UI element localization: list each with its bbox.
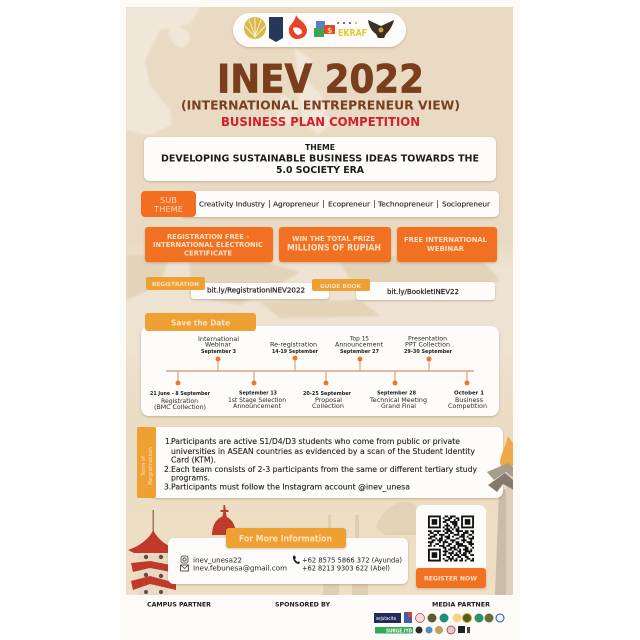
event: top 15 announcement: Top 15 (349, 336, 369, 342)
outer page margin (120, 0, 520, 640)
panel: sub theme: THEME (153, 205, 183, 214)
event: business competition (448, 390, 487, 410)
link: registration (146, 277, 329, 299)
panel: contact information (168, 528, 408, 584)
phone numbers: +62 8575 5866 372 (Ayunda) (302, 556, 402, 564)
event: technical meeting: Technical Meeting (369, 398, 427, 404)
event: business competition: Business (455, 398, 483, 404)
panel: sub theme (141, 191, 499, 217)
rules list: programs. (171, 474, 210, 482)
event: top 15 announcement: September 27 (340, 349, 379, 355)
event: presentation: 29-30 September (404, 349, 452, 355)
panel: theme: 5.0 SOCIETY ERA (276, 165, 364, 176)
heading: save the date (145, 313, 256, 331)
subtitle: (INTERNATIONAL ENTREPRENEUR VIEW) (181, 98, 460, 112)
media partner logos (374, 612, 504, 634)
panel: timeline (141, 313, 499, 416)
event: registration: (BMC Collection) (154, 405, 206, 411)
title: INEV 2022 (217, 58, 424, 102)
vertical label: Registration (148, 446, 154, 485)
icon: shield logo (269, 17, 283, 42)
event: presentation: Presentation (408, 336, 447, 342)
event: business competition: October 1 (454, 390, 484, 396)
monument top: flame and cap (487, 436, 513, 492)
event: re-registration: Re-registration (270, 342, 317, 348)
event: technical meeting (369, 390, 427, 410)
link: guide book (312, 279, 495, 300)
panel: sub theme: Agropreneur (273, 200, 319, 208)
event: technical meeting: September 28 (377, 390, 416, 396)
callout: free webinar: WEBINAR (427, 245, 465, 253)
rules list: Participants are active S1/D4/D3 students who come from public or private (171, 437, 460, 446)
panel: sub theme: Sociopreneur (442, 200, 490, 208)
footer label: media partner: MEDIA PARTNER (432, 600, 490, 608)
vertical label (141, 446, 154, 485)
event: international webinar (198, 337, 239, 355)
logo pill (233, 13, 406, 47)
button: register now: REGISTER NOW (424, 574, 477, 582)
event: top 15 announcement (335, 336, 384, 355)
panel: sub theme: | (268, 199, 271, 208)
rules list: 1. (165, 437, 172, 446)
phone numbers: +62 8213 9303 622 (Abel) (302, 564, 390, 572)
panel: register QR (416, 505, 486, 588)
panel: sub theme: Creativity Industry (199, 200, 265, 208)
callout: registration free: REGISTRATION FREE - (167, 233, 249, 241)
callout: free webinar (397, 227, 497, 262)
event: technical meeting: Grand Final (381, 404, 416, 410)
logo: Ekraf (337, 22, 367, 39)
event: registration: Registration (161, 399, 198, 405)
event: proposal collection (303, 391, 351, 410)
event: re-registration: 14-19 September (272, 349, 318, 355)
icon: email (180, 565, 188, 571)
heading: save the date: Save the Date (171, 318, 231, 328)
panel: sub theme: SUB (160, 196, 177, 205)
event: registration (150, 391, 210, 411)
rules list: Card (KTM). (171, 456, 216, 464)
faint skyline towers (323, 502, 416, 595)
event: top 15 announcement: Announcement (335, 342, 384, 348)
callout: free webinar: FREE INTERNATIONAL (404, 236, 488, 244)
email address: Inev.febunesa@gmail.com (193, 564, 287, 572)
media partner logos: SURGE.IYD (386, 628, 412, 634)
icon: flame logo (289, 15, 307, 39)
pagoda illustration (128, 510, 176, 595)
panel: theme: DEVELOPING SUSTAINABLE BUSINESS IDEAS TOWARDS THE (161, 154, 479, 164)
media partner logos: sejutacita (376, 616, 396, 622)
rules list: Participants must follow the Instagram account @inev_unesa (171, 482, 410, 492)
callout: registration free: INTERNATIONAL ELECTRONIC (153, 241, 263, 249)
panel: sub theme: Ecopreneur (328, 200, 370, 208)
event: presentation: PPT Collection (405, 342, 450, 348)
event: proposal collection: Proposal (315, 398, 342, 404)
link: registration: REGISTRATION (152, 282, 199, 288)
link: registration: bit.ly/RegistrationINEV2022 (207, 286, 305, 294)
rules list (164, 437, 478, 492)
timeline axis and markers (166, 356, 474, 386)
heading: for more information (226, 528, 346, 548)
panel: sub theme: | (322, 199, 325, 208)
red dome illustration (212, 505, 236, 535)
footer label: sponsored by: SPONSORED BY (275, 600, 330, 608)
event: international webinar: Webinar (205, 342, 232, 348)
rules list: universities in ASEAN countries as evidenced by a scan of the Student Identity (171, 447, 476, 456)
icon: instagram (181, 556, 188, 563)
panel: sub theme: Technopreneur (377, 200, 433, 208)
event: business competition: Competition (448, 404, 487, 410)
event: first stage announcement: Announcement (233, 404, 282, 410)
icon: phone (293, 556, 300, 564)
callout: registration free (145, 227, 273, 262)
icon: university logo (244, 17, 266, 39)
icon: eagle logo (368, 20, 394, 38)
monument column (495, 470, 513, 595)
panel: sub theme: | (436, 199, 439, 208)
event: re-registration (270, 342, 318, 355)
event: international webinar: September 3 (201, 349, 236, 355)
icon: chat money logo: $ (327, 26, 333, 35)
panel: terms of registration (137, 427, 503, 498)
rules list: 3. (164, 482, 171, 492)
event: first stage announcement: September 13 (239, 390, 277, 396)
logo: Ekraf: EKRAF (338, 28, 367, 39)
callout: total prize: MILLIONS OF RUPIAH (287, 244, 381, 254)
phone numbers (302, 556, 402, 572)
panel: sub theme: | (373, 199, 376, 208)
rules list: 2. (164, 465, 171, 474)
callout: total prize (279, 227, 391, 262)
heading: for more information: For More Information (239, 534, 332, 544)
event: international webinar: International (198, 337, 239, 343)
event: proposal collection: 20-25 September (303, 391, 351, 397)
rules list: Each team consists of 2-3 participants from the same or different tertiary study (171, 465, 478, 474)
competition heading: BUSINESS PLAN COMPETITION (221, 115, 420, 129)
poster background with map (126, 7, 513, 595)
vertical label: Term of (141, 455, 147, 477)
link: guide book: bit.ly/BookletINEV22 (387, 288, 459, 296)
panel: theme (144, 137, 496, 181)
callout: total prize: WIN THE TOTAL PRIZE (292, 235, 375, 243)
event: presentation (404, 336, 452, 355)
panel: theme: THEME (305, 143, 335, 152)
event: proposal collection: Collection (312, 404, 344, 410)
event: first stage announcement: 1st Stage Selection (228, 398, 286, 404)
callout: registration free: CERTIFICATE (184, 250, 232, 258)
link: guide book: GUIDE BOOK (320, 284, 362, 290)
instagram handle: inev_unesa22 (193, 556, 242, 564)
QR code (428, 516, 474, 561)
event: registration: 21 June - 8 September (150, 391, 210, 397)
footer label: campus partner: CAMPUS PARTNER (147, 600, 211, 608)
icon: chat money logo (314, 21, 335, 37)
event: first stage announcement (228, 390, 286, 410)
